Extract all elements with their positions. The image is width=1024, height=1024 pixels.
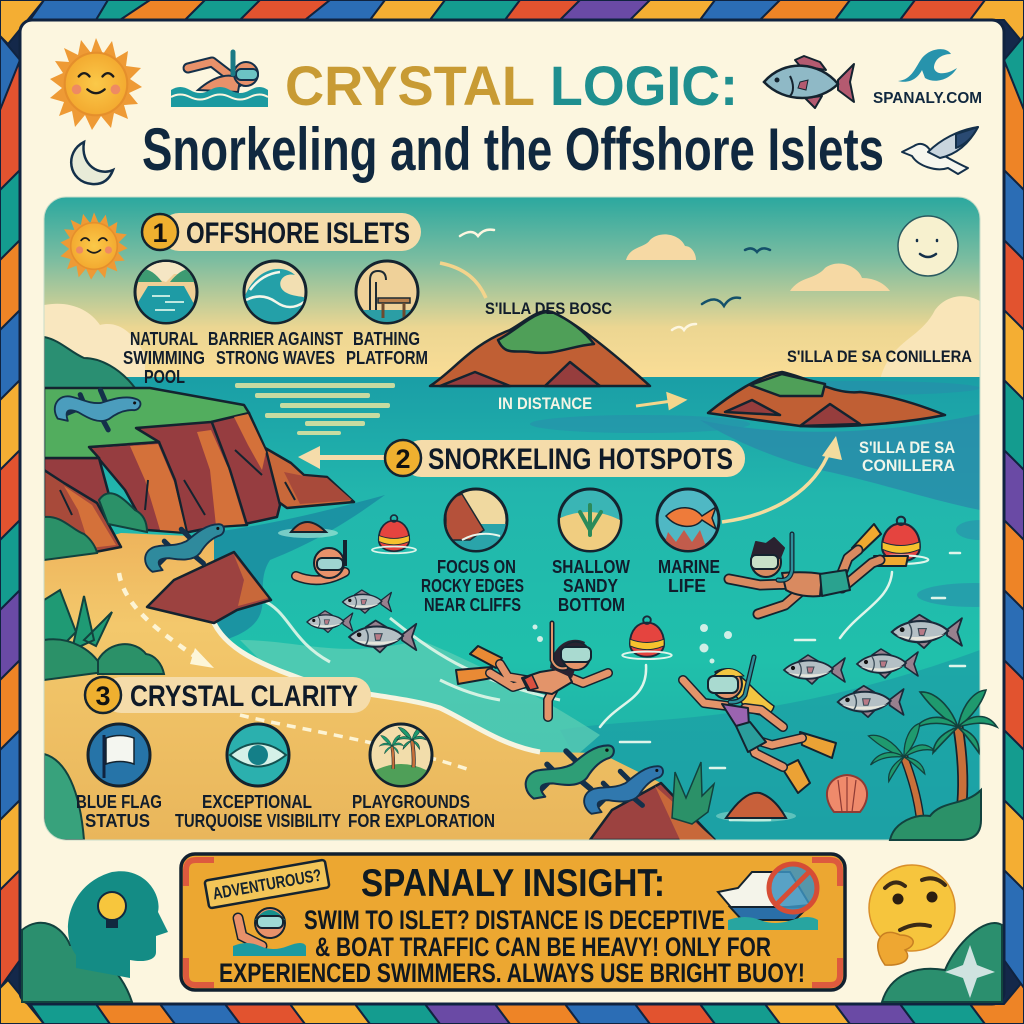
insight body: SWIM TO ISLET? DISTANCE IS DECEPTIVE [304, 905, 725, 935]
snorkeler: right swimmer [729, 524, 908, 614]
palm tree: short [864, 722, 947, 824]
coastal plant [672, 762, 714, 824]
scene outline [44, 197, 980, 840]
label: S'Illa de Sa Conillera, water [859, 438, 955, 475]
label: marine life [658, 557, 720, 596]
icon: turquoise eye [227, 724, 289, 786]
islet labels [485, 299, 972, 475]
birds [460, 230, 770, 330]
orange cliff highlights [64, 414, 352, 548]
arrow: to cliffs [298, 446, 386, 469]
insight body [219, 905, 805, 988]
label: marine life: MARINE [658, 557, 720, 577]
icon: head with light bulb [68, 871, 168, 978]
snorkeler: surface swimmer [296, 540, 345, 580]
deeper water [530, 381, 1024, 607]
islet: S'Illa des Bosc [430, 311, 650, 386]
icon: bathing platform [356, 261, 418, 326]
torso [782, 572, 822, 596]
label: playgrounds for exploration: PLAYGROUNDS [352, 792, 470, 812]
sign: Adventurous?: ADVENTUROUS? [211, 866, 323, 903]
water sparkles and buoy lines [600, 553, 965, 820]
callout: Spanaly insight [181, 854, 845, 990]
icon: blue flag [88, 724, 150, 786]
icon: no boats [718, 864, 818, 930]
label: exceptional turquoise visibility: EXCEPTIONAL [202, 792, 312, 812]
lizard: on cliff [54, 388, 142, 432]
cliff face centre [137, 420, 247, 533]
head [708, 657, 754, 702]
swimwear [524, 675, 538, 690]
header [50, 38, 982, 184]
insight body: EXPERIENCED SWIMMERS. ALWAYS USE BRIGHT BUOY! [219, 958, 805, 988]
lizard: green [526, 745, 614, 799]
small sea rock [278, 522, 338, 538]
panel: illustrated sea scene [44, 197, 1024, 847]
heading pill [403, 440, 745, 477]
icon: sandy bottom [559, 489, 621, 552]
heading text: OFFSHORE ISLETS [186, 217, 410, 250]
label: natural swimming pool [123, 329, 205, 387]
sea [44, 377, 980, 847]
back cliff [44, 458, 109, 510]
label: S'Illa de Sa Conillera, water: S'ILLA DE SA [859, 438, 955, 457]
label: S'Illa de Sa Conillera: S'ILLA DE SA CONILLERA [787, 347, 972, 366]
cliff cracks [60, 450, 295, 515]
school of fish [307, 590, 962, 717]
seashell [827, 775, 867, 812]
fish [892, 615, 962, 648]
label: barrier against strong waves: STRONG WAVES [216, 348, 335, 368]
icon: crescent moon [71, 142, 113, 184]
footpath [119, 573, 470, 770]
icon: natural pool [135, 261, 197, 325]
buoy [622, 616, 672, 659]
thinking face emoji [869, 865, 955, 965]
label: bathing platform: BATHING [353, 329, 420, 349]
deep water near cliff [210, 495, 385, 640]
bushes top [44, 337, 135, 388]
icon: marine life [657, 489, 719, 552]
buoy [372, 515, 416, 553]
hair [715, 669, 774, 715]
label: shallow sandy bottom [552, 557, 630, 615]
labels [123, 329, 428, 387]
label: shallow sandy bottom: SHALLOW [552, 557, 630, 577]
label: blue flag status: STATUS [85, 811, 150, 831]
lizards [51, 372, 663, 814]
icon: seagull [902, 127, 978, 174]
limbs [490, 664, 608, 717]
labels [76, 792, 495, 831]
fish [838, 686, 904, 717]
sky [44, 197, 980, 379]
heading number [385, 440, 421, 476]
label: bathing platform [346, 329, 428, 368]
labels [421, 557, 720, 615]
clouds [44, 234, 985, 380]
icon: palm islands [370, 724, 432, 790]
label: blue flag status [76, 792, 162, 831]
label: playgrounds for exploration [348, 792, 495, 831]
torso [722, 704, 749, 726]
heading number [85, 677, 121, 713]
section 3 [76, 677, 495, 831]
label: barrier against strong waves [208, 329, 343, 368]
icon: fish [764, 56, 854, 108]
palm tree: tall [915, 690, 997, 803]
fish [349, 620, 416, 652]
cliff face centre-right [211, 413, 280, 525]
callout box [181, 854, 845, 990]
heading number: 3 [95, 681, 111, 711]
label: blue flag status: BLUE FLAG [76, 792, 162, 812]
large cliff [44, 388, 354, 553]
cliff face east [260, 445, 354, 508]
icon: smiling sun [50, 38, 142, 130]
heading number: 2 [395, 444, 411, 474]
label: S'Illa de Sa Conillera, water: CONILLERA [862, 456, 955, 475]
bottom right bushes with sparkle [882, 923, 1002, 1002]
icon: wave [244, 261, 308, 325]
flippers [456, 646, 502, 684]
label: natural swimming pool: NATURAL [130, 329, 198, 349]
sand beach [44, 533, 715, 840]
section 1 [60, 212, 428, 387]
cliff face west [89, 442, 187, 533]
buoy [874, 517, 928, 564]
label: shallow sandy bottom: BOTTOM [558, 595, 625, 615]
label: marine life: LIFE [668, 576, 706, 596]
title line 1: LOGIC: [550, 54, 738, 117]
title line 1 [285, 54, 738, 117]
island shrub [890, 790, 981, 840]
surf foam [214, 623, 540, 752]
snorkeler: diver [456, 623, 608, 717]
head [550, 623, 591, 678]
label: barrier against strong waves: BARRIER AGAINST [208, 329, 343, 349]
head [751, 534, 792, 580]
foreground rock [590, 783, 715, 840]
flippers [852, 524, 908, 566]
small sun [60, 212, 128, 280]
insight heading: SPANALY INSIGHT: [361, 862, 665, 905]
corner ornaments [186, 860, 840, 985]
label: focus on rocky edges near cliffs: FOCUS ON [437, 557, 516, 577]
label: shallow sandy bottom: SANDY [563, 576, 618, 596]
fish [857, 649, 918, 678]
brand url: SPANALY.COM [873, 90, 982, 107]
fish [307, 611, 353, 632]
bubbles [532, 624, 732, 664]
heading number: 1 [152, 218, 168, 248]
label: exceptional turquoise visibility: TURQUOISE VISIBILITY [175, 811, 341, 831]
icon: wave logo [898, 49, 957, 82]
swimmer holding sign [233, 908, 306, 956]
bottom left: thinking head [22, 871, 168, 1002]
insight body: & BOAT TRAFFIC CAN BE HEAVY! ONLY FOR [315, 932, 771, 962]
flippers [782, 732, 836, 793]
arrow: distance [636, 394, 684, 408]
small moon [898, 216, 958, 276]
arrow: to Bosc [440, 263, 486, 298]
lizard: blue [584, 766, 663, 814]
arrow: marine life to Conillera [722, 436, 842, 522]
label: bathing platform: PLATFORM [346, 348, 428, 368]
icon: swimmer [171, 52, 268, 107]
limbs [683, 680, 802, 767]
label: focus on rocky edges near cliffs: ROCKY EDGES [421, 576, 524, 596]
lower left cliff [44, 470, 121, 553]
icon: rocky edge [445, 489, 507, 554]
icon: light bulb [98, 892, 126, 928]
label: focus on rocky edges near cliffs: NEAR CLIFFS [424, 595, 521, 615]
palm trees [864, 690, 997, 824]
sea rock [716, 793, 796, 822]
islet: S'Illa de Sa Conillera [708, 372, 945, 427]
label: in distance: IN DISTANCE [498, 394, 592, 413]
fish [343, 590, 391, 613]
label: exceptional turquoise visibility [175, 792, 341, 831]
sun reflection [235, 383, 395, 435]
shallow band [240, 640, 600, 753]
snorkeler: blonde swimmer [683, 657, 836, 793]
trunks [820, 570, 850, 596]
heading text: SNORKELING HOTSPOTS [428, 443, 733, 476]
label: S'Illa des Bosc: S'ILLA DES BOSC [485, 299, 612, 318]
limbs [729, 550, 880, 614]
shorts [736, 722, 766, 752]
label: focus on rocky edges near cliffs [421, 557, 524, 615]
title line 1: CRYSTAL [285, 54, 535, 117]
torso [522, 668, 572, 694]
label: natural swimming pool: SWIMMING [123, 348, 205, 368]
heading pill [103, 677, 371, 713]
lizard: on rock [145, 524, 224, 572]
bushes [22, 923, 132, 1002]
buoys [372, 515, 928, 659]
beach bushes [44, 493, 164, 840]
heading text: CRYSTAL CLARITY [130, 680, 358, 713]
cliff plateau [44, 388, 249, 458]
heading pill [160, 213, 421, 251]
middle rock [147, 552, 271, 623]
section 2 [298, 440, 745, 615]
fish [784, 655, 845, 684]
deep lower water [580, 650, 980, 812]
heading number [142, 214, 178, 250]
label: natural swimming pool: POOL [144, 367, 185, 387]
label: playgrounds for exploration: FOR EXPLORATION [348, 811, 495, 831]
surf lines [262, 600, 560, 700]
